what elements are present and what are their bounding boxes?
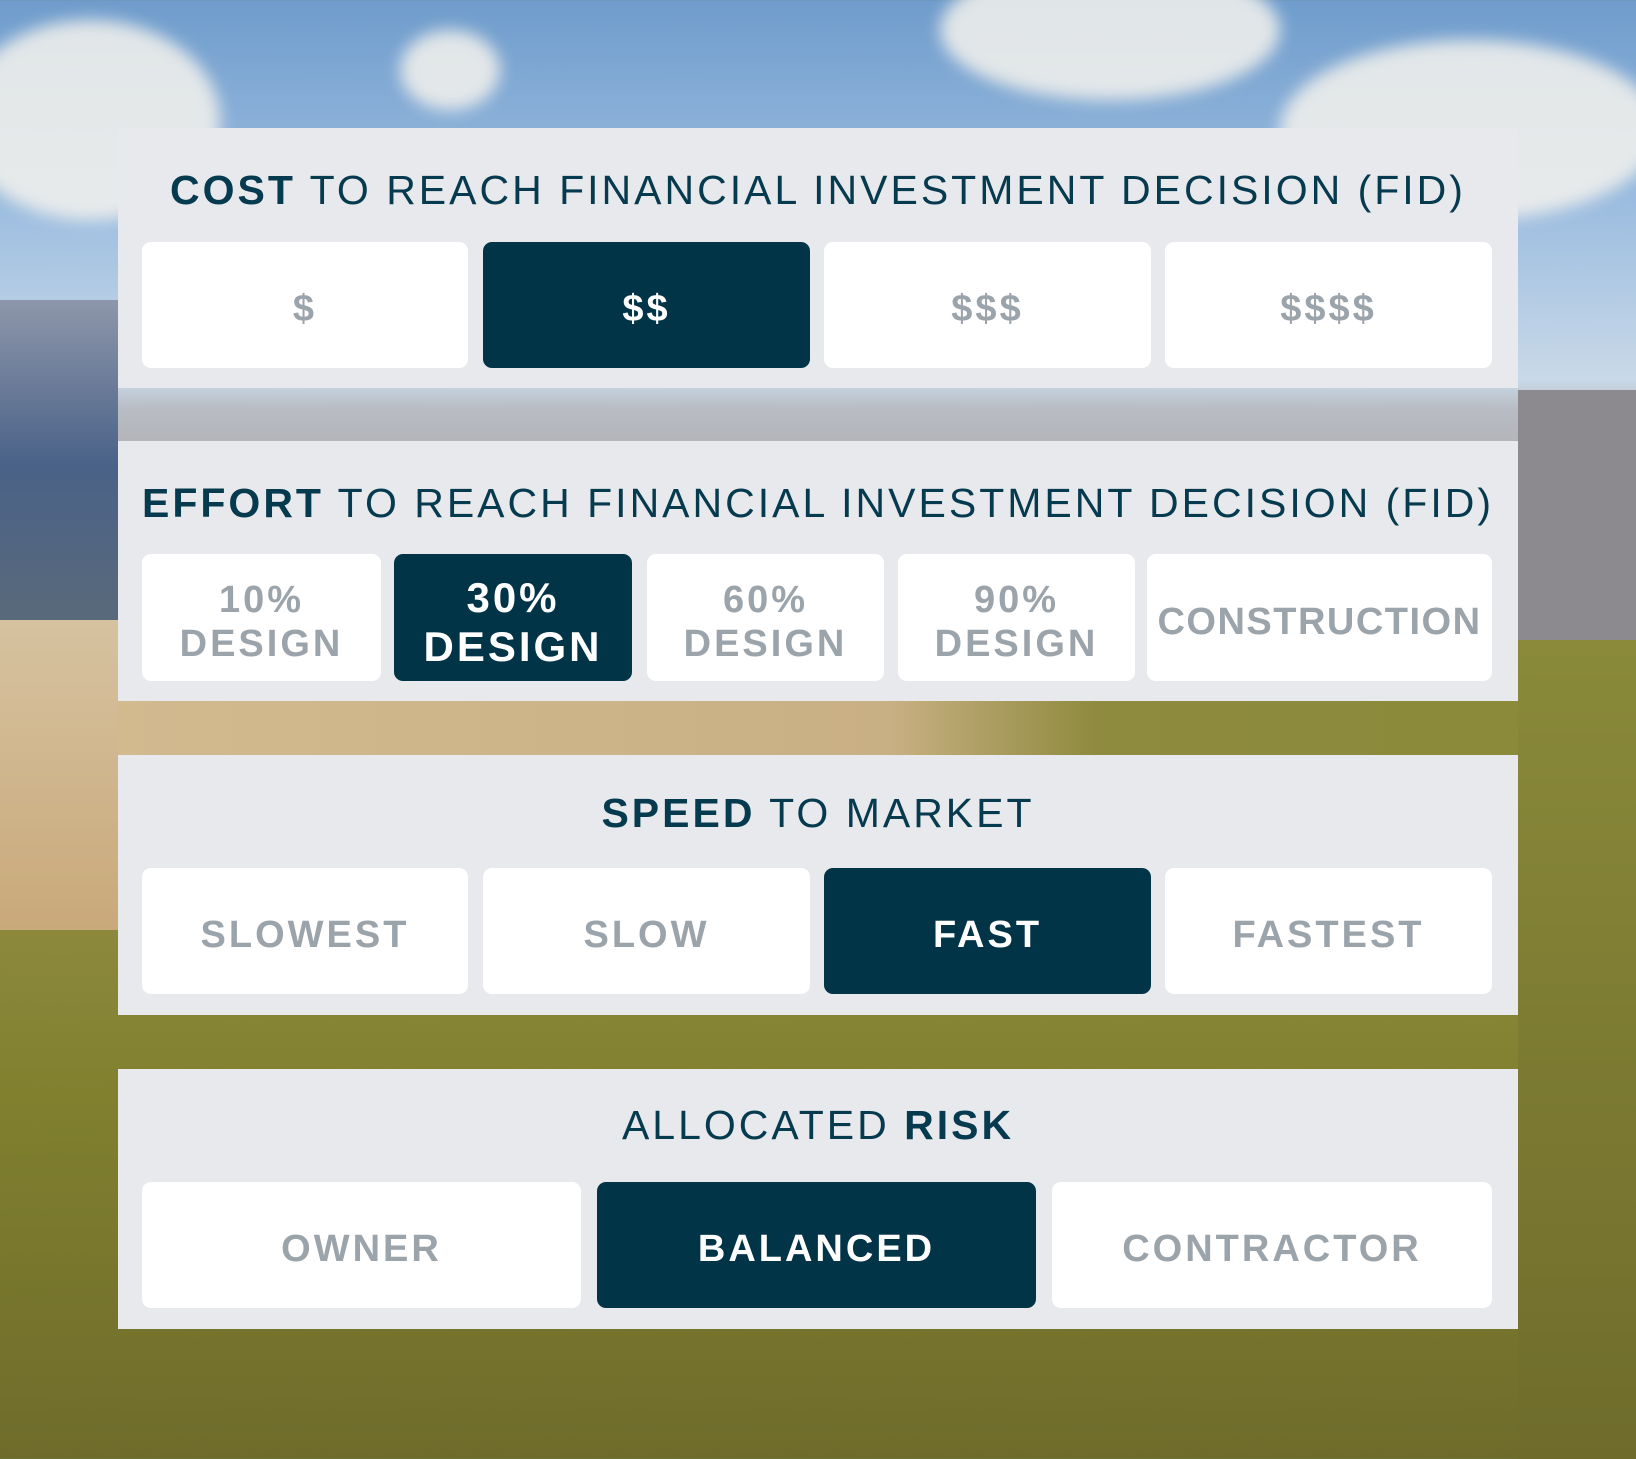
button: $$$: $$$ — [951, 288, 1024, 330]
button: 10% design: 10% — [219, 579, 304, 621]
button: fastest — [1165, 868, 1492, 994]
panel: cost — [118, 128, 1518, 388]
button: balanced: BALANCED — [698, 1228, 935, 1270]
button: slow — [483, 868, 810, 994]
button: $$$ — [824, 242, 1151, 368]
button: fastest: FASTEST — [1232, 914, 1425, 956]
button: owner: OWNER — [281, 1228, 442, 1270]
button: $$: $$ — [622, 288, 671, 330]
button: balanced — [597, 1182, 1036, 1308]
button: $$ — [483, 242, 810, 368]
button: 90% design: DESIGN — [935, 622, 1098, 664]
button: fast: FAST — [933, 914, 1042, 956]
button: 60% design — [647, 554, 884, 681]
button: slow: SLOW — [584, 914, 709, 956]
heading: effort: EFFORT TO REACH FINANCIAL INVESTMENT DECISION (FID) — [142, 480, 1494, 526]
button: 30% design: DESIGN — [423, 622, 603, 670]
button: construction: CONSTRUCTION — [1157, 601, 1482, 643]
button: $$$$ — [1165, 242, 1492, 368]
panel: risk — [118, 1069, 1518, 1329]
button: owner — [142, 1182, 581, 1308]
heading: risk: ALLOCATED RISK — [622, 1102, 1014, 1148]
button: 10% design: DESIGN — [180, 622, 343, 664]
button: 30% design: 30% — [466, 574, 560, 621]
button: 30% design — [394, 554, 632, 681]
heading: speed: SPEED TO MARKET — [601, 790, 1035, 836]
button: 60% design: DESIGN — [684, 622, 847, 664]
panel: effort — [118, 441, 1518, 701]
button: 10% design — [142, 554, 381, 681]
button: 90% design: 90% — [974, 579, 1059, 621]
button: 60% design: 60% — [723, 579, 808, 621]
button: construction — [1147, 554, 1492, 681]
button: $$$$: $$$$ — [1280, 288, 1377, 330]
button: contractor — [1052, 1182, 1492, 1308]
button: fast — [824, 868, 1151, 994]
panel: speed — [118, 755, 1518, 1015]
button: $ — [142, 242, 468, 368]
button: slowest — [142, 868, 468, 994]
button: contractor: CONTRACTOR — [1122, 1228, 1422, 1270]
heading: cost: COST TO REACH FINANCIAL INVESTMENT DECISION (FID) — [170, 167, 1466, 213]
button: $: $ — [293, 288, 317, 330]
button: 90% design — [898, 554, 1135, 681]
button: slowest: SLOWEST — [201, 914, 409, 956]
